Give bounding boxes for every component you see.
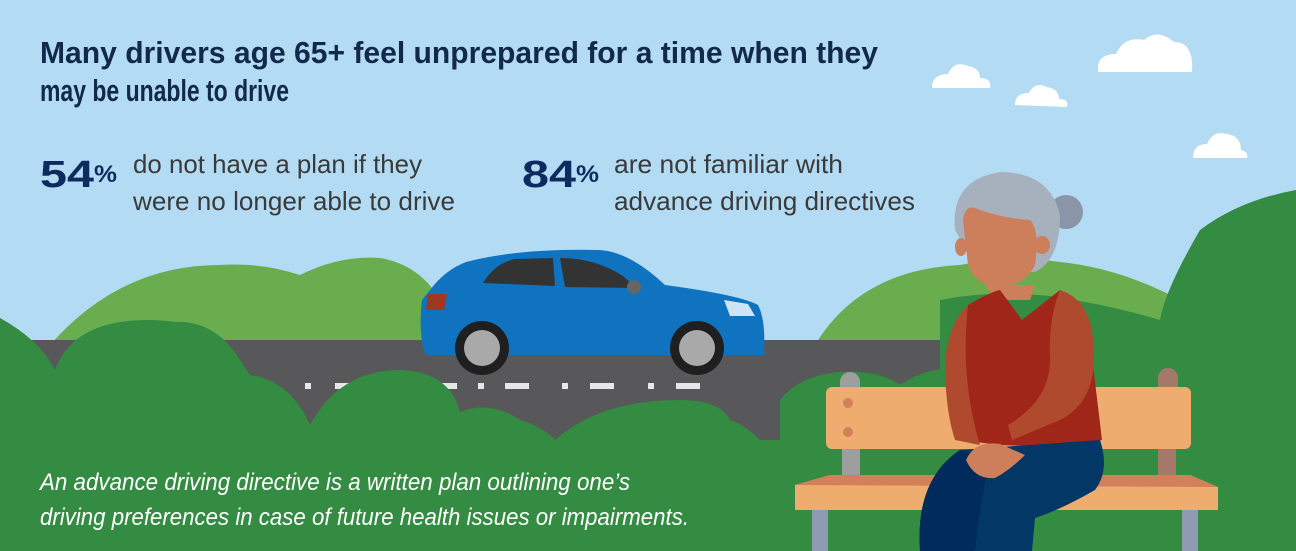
stat: 54% xyxy=(40,149,455,216)
footnote xyxy=(38,469,689,531)
footnote: An advance driving directive is a written plan outlining one’s xyxy=(38,469,630,496)
stat: 54%: do not have a plan if they xyxy=(133,149,422,179)
foreground bushes xyxy=(0,318,800,551)
stat: 84%: advance driving directives xyxy=(614,186,915,216)
title: Many drivers age 65+ feel unprepared for a time when they xyxy=(40,35,879,70)
stat: 84%: 84 xyxy=(522,154,576,196)
stat: 84%: % xyxy=(576,161,599,188)
stat: 54%: were no longer able to drive xyxy=(132,186,455,216)
road xyxy=(0,340,960,450)
background hills xyxy=(50,258,1180,345)
stat: 54%: % xyxy=(94,161,117,188)
stat: 84%: are not familiar with xyxy=(614,149,843,179)
title xyxy=(40,35,879,108)
clouds xyxy=(932,34,1247,158)
bench xyxy=(795,368,1218,551)
title: may be unable to drive xyxy=(40,73,289,108)
stat: 84% xyxy=(522,149,915,216)
right dark green bushes xyxy=(780,190,1296,551)
footnote: driving preferences in case of future health issues or impairments. xyxy=(40,504,689,531)
stat: 54%: 54 xyxy=(40,154,94,196)
woman xyxy=(920,172,1104,551)
car xyxy=(421,250,764,375)
